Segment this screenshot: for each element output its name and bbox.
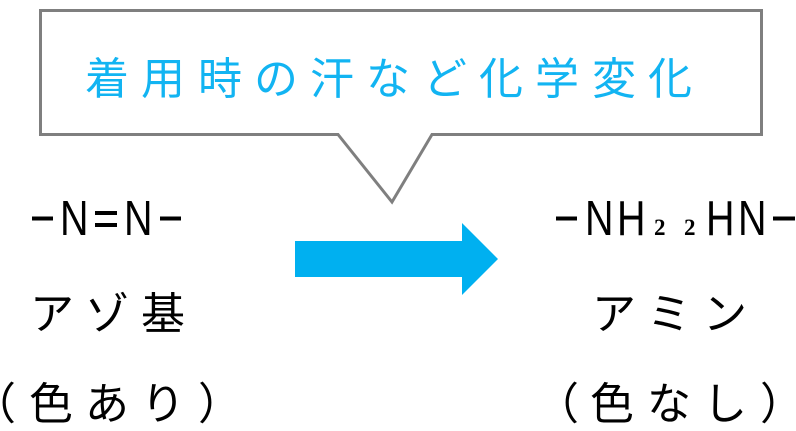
callout text: 着用時の汗など化学変化 [85,55,692,104]
right formula: amine [556,192,795,246]
right formula: amine: N [585,192,614,246]
right formula: amine: 2 [684,215,696,240]
right formula: amine: 2 [654,215,666,240]
left formula: azo group: N [60,192,88,246]
right formula: amine: H [706,192,734,246]
left label: azo: アゾ基 [30,290,185,339]
right formula: amine: H [617,192,646,246]
arrow [295,223,498,295]
left formula: azo group [32,192,181,246]
right label: amine: アミン [592,290,747,339]
right note: colorless: （色なし） [535,380,796,429]
left formula: azo group: N [124,192,152,246]
right formula: amine: N [738,192,766,246]
